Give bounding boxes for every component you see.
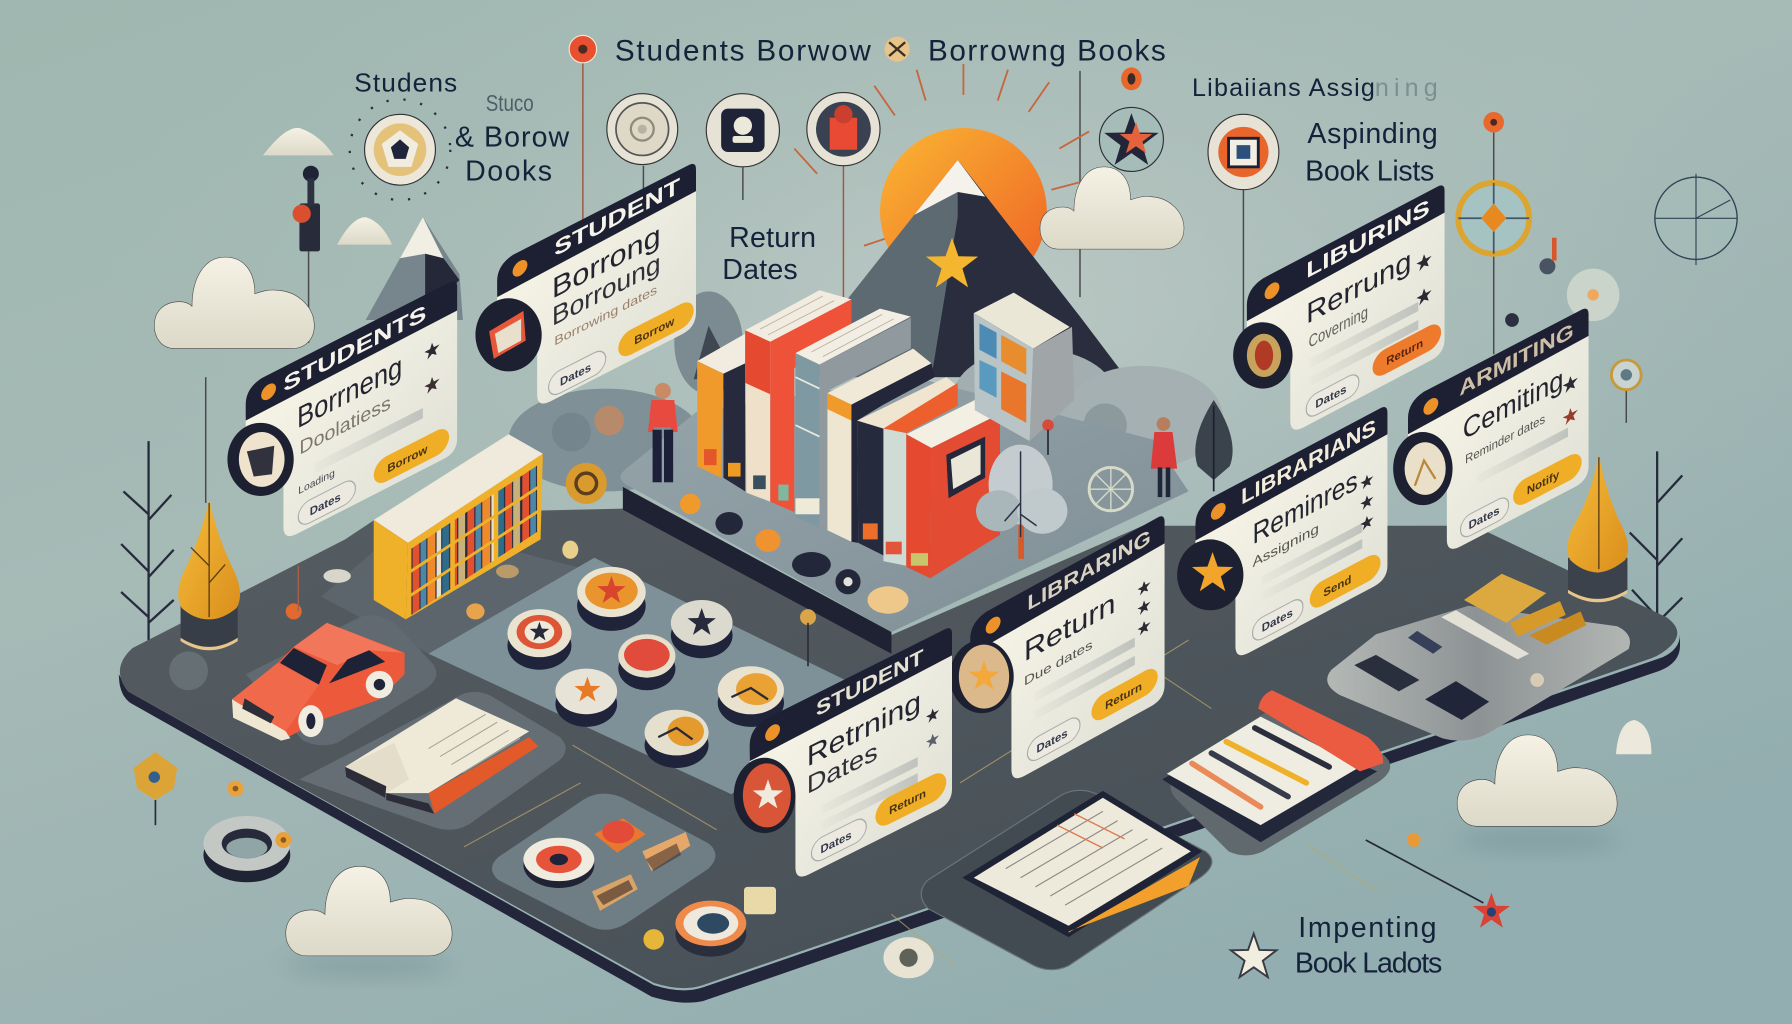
book: gray [795,309,911,528]
book: pale [883,429,906,566]
title: Borrong [552,219,661,305]
icon: small cream ghost [1616,720,1651,754]
subtitle: Coverning [1309,301,1368,352]
label: students left block: Stuco [486,90,534,116]
title: Reminres [1253,464,1358,551]
book: orange [697,334,745,491]
title: Return [1024,586,1115,668]
books row [697,290,1000,578]
icon: red pin [1042,419,1054,455]
icon: open book [345,698,538,814]
panel: bottom book tray [921,790,1212,970]
icon: cloud lower right [1455,735,1619,851]
book: red front [906,400,1000,578]
title: Retrning [807,685,921,773]
icon: card 7 badge [734,758,795,833]
card: students borrowing [246,278,457,560]
cloud: behind mountain [1040,167,1184,249]
planter: right [1567,455,1628,602]
title: Cemiting [1463,362,1563,447]
label: librarians assigning [1192,74,1438,188]
header label: STUDENT [816,644,924,721]
button 5 [555,669,617,727]
tree: left bare [121,441,174,661]
pin: dark marker [293,166,320,251]
panel: discs tray [429,558,869,794]
pin lines [206,63,1626,503]
icon: eye token [883,937,934,978]
cloud: left [154,257,314,349]
icon: red figure badge [807,93,880,166]
header label: STUDENT [554,173,680,261]
right-side decorations [1458,112,1737,390]
small items in tray [523,818,690,911]
planter: left [178,499,240,650]
button 4 [618,634,675,690]
header label: LIBRARIANS [1241,414,1376,510]
icon: cloud lower left [283,866,453,977]
subtitle: Dates [807,736,878,800]
card: cemiting: Notify [1527,468,1559,498]
panel: open book tray [299,692,566,830]
icon: card 3 badge [1233,322,1293,389]
card: students borrowing 2: Borrowing dates [554,282,657,349]
hills behind slab [509,291,1223,491]
icon: red star [1473,893,1510,928]
icon: ring [203,816,290,882]
label: students left block: & Borow [455,121,570,153]
icon: small mountain behind card [366,217,463,320]
header label: LIBRARING [1027,524,1151,616]
heading icon: red dot [569,35,597,63]
tree: pale leaf [976,445,1067,559]
icon: sun with rays [794,64,1089,295]
icon: pentagon badge [350,99,450,200]
title: Borrneng [297,348,402,435]
heading: students borrow: Students Borwow [615,35,871,68]
header label: ARMITING [1459,318,1574,401]
label: students left block: Dooks [465,156,552,188]
icon: cream star [1231,934,1277,977]
icon: central mountain with star [800,160,1126,377]
bookshelf: large [374,434,543,619]
card: librarian return: Return [1105,679,1142,713]
card: students borrowing 2: Borrow [634,314,675,348]
label: importing book labels [1295,912,1442,980]
card: students borrowing 2: Dates [560,360,591,389]
heading icon: star token [885,37,910,62]
person: librarian [1151,417,1177,497]
header label: STUDENTS [283,300,426,397]
card: student returning dates [750,626,952,904]
card: cemiting: Dates [1469,503,1500,532]
icon: card 1 badge [227,423,294,496]
icon: dark tablet badge [706,94,779,167]
subtitle: Due dates [1024,637,1093,689]
tray trinkets near shelf [169,541,578,690]
disc buttons [507,567,784,768]
icon: gold ball [566,463,607,504]
platform inlay lines [464,640,1377,966]
panel: car tray [246,615,436,745]
icon: pale wheel [1089,467,1133,511]
book: red tall [745,290,851,512]
card: librarians reminders: Dates [1262,605,1293,635]
icon: control set [1354,574,1586,720]
book: cream [827,349,935,543]
platform: base [119,509,1680,1003]
card: librarians returning: Dates [1315,382,1347,411]
label: librarians assigning: Aspinding [1307,118,1438,150]
icon: notebook with red roll [1162,690,1383,842]
icon: card 2 badge [475,298,542,371]
slab trinkets [680,494,909,666]
tree: right bare [1630,451,1682,640]
label: return dates: Return [729,222,816,254]
subtitle: Doolatiess [299,391,391,460]
panel: small items tray [492,794,715,930]
card: librarians returning [1247,183,1445,457]
cloud: small dome [337,217,392,245]
card: students borrowing: Loading [298,467,335,497]
icon: red car [232,623,405,741]
subtitle: Reminder dates [1465,411,1545,467]
label: librarians assigning: ning [1375,74,1438,102]
label: importing book labels: Impenting [1298,912,1437,944]
card: student returning dates: Dates [821,828,852,857]
card: students borrowing: Dates [310,490,341,519]
person: student [648,383,678,482]
icon: card 4 badge [1393,432,1453,505]
card: cemiting [1408,306,1589,574]
label: importing book labels: Book Ladots [1295,948,1442,980]
card: students borrowing 2 [497,161,696,429]
card: librarian return [970,514,1165,806]
button 1 [577,567,646,631]
button 2 [507,609,571,670]
button 6 [718,666,784,727]
book: dark [857,377,958,555]
title: Rerrung [1306,244,1411,331]
button 7 [645,710,709,768]
icons: orange dots [227,781,291,848]
subtitle: Borroung [552,247,661,332]
connector to red star [1366,833,1483,903]
card: students borrowing: Borrow [387,442,428,476]
button 3 [671,600,733,658]
label: librarians assigning: Libaiians Assig [1192,74,1375,102]
card: student returning dates: Return [889,786,926,818]
label: students left block: Studens [354,67,457,97]
card: librarian return: Dates [1037,726,1068,756]
subtitle: Assigning [1253,521,1319,571]
gold tokens [643,887,776,950]
small bookcase [974,293,1074,441]
card: librarians reminders: Send [1323,572,1351,600]
icon: star badge [1099,107,1163,171]
label: return dates [722,222,816,286]
cloud: top left small [263,128,334,155]
label: students left block [354,67,570,188]
icon: card 5 badge [1177,539,1243,610]
label: return dates: Dates [722,254,798,286]
icon: spiral badge [607,94,678,165]
icon: shield pin [134,752,177,825]
icon: dark leaf [1195,400,1233,491]
icon: card 6 badge [950,640,1014,713]
panel: notebook tray [1170,708,1390,855]
ring: orange [675,901,746,957]
card: librarians returning: Return [1386,336,1423,368]
icon: small ring [1121,67,1142,90]
header label: LIBURINS [1306,194,1430,283]
card: librarians reminders [1195,405,1387,681]
icon: orange list badge [1208,114,1279,190]
panel: controls tray [1327,606,1630,741]
shelf book rows [411,466,537,615]
icon: bottom ledger [962,791,1202,937]
label: librarians assigning: Book Lists [1305,156,1434,188]
platform: raised central slab [621,377,1189,654]
panel: bookshelf tray [321,523,594,665]
heading: borrowing books: Borrowng Books [928,35,1166,68]
